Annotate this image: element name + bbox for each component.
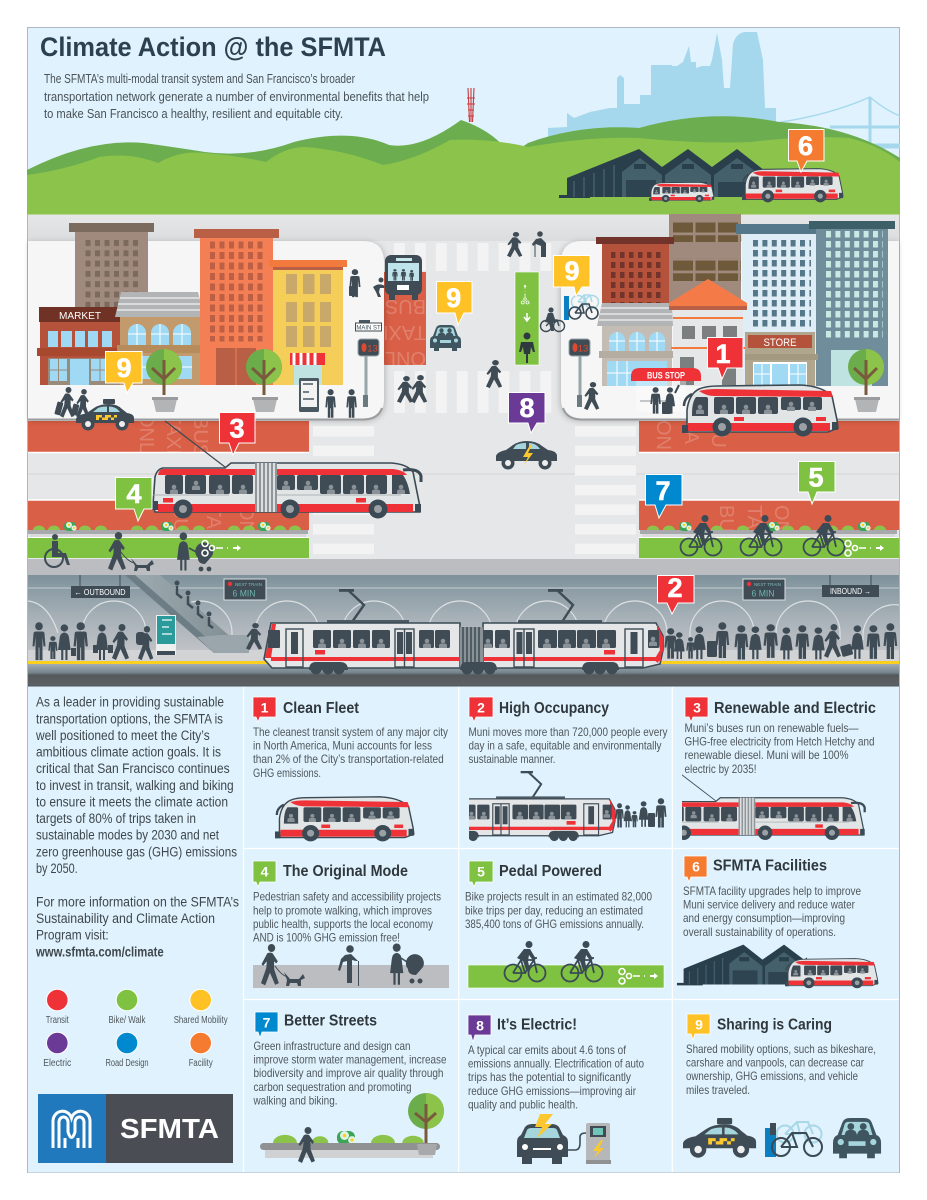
left lower lanes — [28, 412, 309, 558]
right lower lanes: BU — [707, 420, 729, 448]
pedestrian pair — [397, 375, 427, 403]
sign: inbound: INBOUND → — [830, 587, 871, 596]
body text: AND is 100% GHG emission free! — [253, 930, 400, 944]
crosswalk stripes — [313, 243, 636, 556]
left lower lanes: BUS — [189, 416, 211, 457]
people on sidewalk — [325, 389, 357, 418]
left lower lanes: TAXI — [202, 505, 224, 548]
body text: biodiversity and improve air quality through — [254, 1066, 444, 1080]
icon: street sign and signal — [356, 320, 382, 407]
icon: street tree — [848, 349, 884, 412]
icon: bike lane marking right — [845, 540, 884, 556]
icon: Muni facility barn — [559, 149, 765, 198]
sign: next train — [224, 579, 266, 600]
heading: Renewable and Electric — [714, 700, 876, 717]
badge 1 — [708, 338, 743, 379]
panel: 3 Renewable and Electric — [682, 696, 876, 840]
body text: day in a safe, equitable and environmentally — [468, 739, 662, 753]
badge 8: 8 — [476, 1018, 484, 1034]
body text — [253, 890, 441, 944]
badge 4 — [116, 478, 152, 521]
legend: Road Design — [106, 1058, 148, 1069]
legend: Electric — [43, 1058, 71, 1069]
left sidewalk block — [28, 241, 384, 420]
text block: intro: to invest in transit, walking and biking — [36, 778, 234, 793]
pedestrian — [584, 382, 599, 410]
SFMTA logo: SFMTA — [120, 1113, 219, 1144]
cyclist — [680, 515, 722, 556]
sign: outbound — [71, 575, 130, 598]
badge 4: 4 — [261, 864, 269, 880]
intro text: transportation network generate a number of environmental benefits that help — [44, 90, 429, 104]
panel: subway station — [28, 575, 899, 686]
body text: electric by 2035! — [684, 762, 756, 776]
sign: outbound: ← OUTBOUND — [74, 588, 126, 597]
building: market — [37, 307, 120, 385]
body text: 385,400 tons of GHG emissions annually. — [465, 917, 644, 931]
right sidewalk block — [561, 241, 899, 420]
panel: 5 Pedal Powered — [465, 861, 664, 988]
left lower lanes: BUS — [169, 505, 191, 546]
text block: more information: Program visit: — [36, 928, 109, 943]
body text: help to promote walking, which improves — [253, 903, 432, 917]
waiting passengers left — [32, 622, 153, 660]
body text — [253, 725, 448, 780]
body text: trips has the potential to significantly — [468, 1070, 631, 1084]
badge 9 intersection: 9 — [446, 283, 461, 313]
sign: next train: NEXT TRAIN — [754, 582, 781, 587]
intro text: The SFMTA’s multi-modal transit system and San Francisco’s broader — [44, 72, 355, 86]
pedestrian with stroller — [177, 532, 213, 571]
icon: wayfinding kiosk — [299, 378, 319, 412]
icon: bus — [785, 959, 878, 988]
body text: quality and public health. — [468, 1097, 578, 1111]
badge 9 bikeshare — [554, 256, 590, 296]
heading: The Original Mode — [283, 863, 408, 880]
badge 3 — [220, 412, 255, 455]
icon: bikeshare — [765, 1122, 822, 1157]
text block: intro: transportation options, the SFMTA is — [36, 711, 223, 726]
icon: cyclist — [504, 941, 546, 982]
text block: intro — [35, 695, 237, 876]
badge 2: 2 — [477, 700, 485, 716]
text block: more information — [35, 895, 239, 960]
badge 5: 5 — [808, 462, 824, 492]
text block: intro: targets of 80% of trips taken in — [36, 811, 196, 826]
people on left sidewalk — [45, 532, 213, 571]
right lower lanes: BUS — [715, 505, 737, 546]
SFMTA logo — [38, 1094, 233, 1163]
child boarding — [373, 278, 385, 297]
building: brown tall — [669, 214, 741, 307]
badge 9 bikeshare: 9 — [564, 256, 580, 286]
heading: Better Streets — [284, 1012, 377, 1030]
badge 8: 8 — [519, 393, 535, 423]
badge 3 — [685, 697, 708, 722]
panel: street scene — [28, 213, 899, 575]
body text: walking and biking. — [253, 1093, 338, 1107]
people waiting at taxi — [54, 387, 90, 418]
right lower lanes: TAXI — [743, 505, 765, 548]
road surface — [28, 214, 899, 559]
heading: It’s Electric! — [497, 1016, 577, 1034]
panel: 2 High Occupancy — [468, 696, 668, 842]
bike lane strip — [468, 965, 664, 988]
text block: intro: by 2050. — [36, 861, 78, 876]
building: brown tower — [69, 223, 154, 312]
badge 6: 6 — [692, 858, 700, 874]
sign: inbound — [822, 575, 879, 597]
sign: next train — [743, 579, 785, 600]
title: Climate Action @ the SFMTA — [40, 32, 386, 62]
pedestrian crossing — [486, 360, 502, 388]
icon: bus at facility — [742, 169, 843, 202]
waiting passengers right — [664, 622, 897, 660]
badge 2: 2 — [667, 573, 683, 603]
cyclist — [804, 515, 844, 556]
body text: in North America, Muni accounts for less — [253, 739, 432, 753]
icon: street sign and signal: MAIN ST — [356, 326, 381, 332]
body text: and energy consumption—improving — [683, 911, 845, 925]
icon: bus stop — [631, 368, 701, 412]
icon: charging station — [586, 1123, 611, 1164]
escalator — [125, 575, 249, 653]
person walking a bicycle — [540, 307, 564, 332]
badge 3: 3 — [693, 700, 701, 716]
station kiosk — [156, 615, 176, 655]
body text: Shared mobility options, such as bikeshare, — [686, 1042, 876, 1056]
text block: intro: sustainable modes by 2030 and net — [36, 828, 219, 843]
icon: bike marking — [619, 968, 658, 984]
icon: articulated electric bus — [152, 421, 421, 518]
legend — [43, 989, 228, 1069]
icon: small bus at facility — [649, 182, 714, 202]
body text — [683, 884, 861, 939]
badge 6 — [684, 856, 707, 882]
body text: Pedestrian safety and accessibility projects — [253, 890, 441, 904]
body text: ownership, GHG emissions, and vehicle — [686, 1069, 858, 1083]
person walking to train — [246, 623, 262, 650]
left lower lanes: TAXI — [162, 412, 184, 455]
body text: public health, supports the local economy — [253, 917, 433, 931]
body text: than 2% of the City’s transportation-related — [253, 752, 444, 766]
body text — [686, 1042, 876, 1097]
body text: The cleanest transit system of any major city — [253, 725, 448, 739]
badge 4: 4 — [126, 479, 142, 509]
body text: Muni moves more than 720,000 people every — [468, 725, 668, 739]
badge 2 — [658, 573, 694, 614]
badge 6: 6 — [798, 131, 813, 161]
text block: more information: Sustainability and Climate Action — [36, 911, 215, 926]
sign: next train: NEXT TRAIN — [235, 582, 262, 587]
text block: intro: zero greenhouse gas (GHG) emissions — [36, 844, 237, 859]
body text: improve storm water management, increase — [254, 1053, 447, 1067]
left lower lanes: ONLY — [235, 505, 257, 558]
icon: Sutro Tower — [467, 88, 475, 122]
building: orange roof house — [669, 279, 747, 386]
body text: carbon sequestration and promoting — [254, 1080, 412, 1094]
icon: bus stop: BUS STOP — [647, 370, 686, 382]
badge 7: 7 — [655, 476, 671, 506]
center transit lane: BUS — [385, 295, 426, 317]
body text — [684, 721, 874, 776]
heading: Pedal Powered — [499, 863, 602, 880]
body text: reduce GHG emissions—improving air — [468, 1084, 636, 1098]
intro text: to make San Francisco a healthy, resilient and equitable city. — [44, 107, 343, 121]
icon: pedestrian signal — [569, 339, 590, 407]
text block: intro: As a leader in providing sustainable — [36, 695, 224, 710]
building: market: MARKET — [59, 311, 101, 322]
icon: pedestrian with stroller — [390, 943, 424, 985]
body text: bike trips per day, reducing an estimated — [465, 903, 643, 917]
icon: street tree — [246, 349, 282, 412]
icon: articulated bus — [682, 774, 866, 840]
building: teal tower — [809, 221, 895, 386]
icon: barn — [676, 944, 807, 986]
icon: light rail train — [264, 589, 663, 674]
body text: Bike projects result in an estimated 82,000 — [465, 890, 652, 904]
badge 6 — [788, 130, 824, 172]
body text: carshare and vanpools, can decrease car — [686, 1056, 864, 1070]
icon: bike lane marking left — [202, 540, 241, 556]
station arches — [28, 601, 899, 640]
legend: Shared Mobility — [174, 1015, 228, 1026]
badge 7 — [255, 1012, 278, 1038]
body text: Green infrastructure and design can — [254, 1039, 410, 1053]
body text: GHG emissions. — [253, 766, 321, 780]
badge 4 — [253, 861, 276, 887]
body text: SFMTA facility upgrades help to improve — [683, 884, 861, 898]
people on escalator — [174, 580, 213, 628]
panel: 6 SFMTA Facilities — [677, 856, 878, 988]
icon: city skyline — [548, 32, 776, 165]
front hills — [27, 137, 900, 214]
badge 5 — [469, 861, 493, 887]
body text: A typical car emits about 4.6 tons of — [468, 1043, 627, 1057]
panel: information section — [28, 686, 899, 1172]
panel: 7 Better Streets — [253, 1012, 447, 1163]
text block: intro: ambitious climate action goals. It is — [36, 745, 221, 760]
badge 9: 9 — [695, 1016, 703, 1032]
icon: waiting crowd — [615, 798, 666, 828]
body text — [468, 1043, 644, 1111]
text block: intro: critical that San Francisco continues — [36, 761, 230, 776]
icon: green planter with tree — [260, 1093, 444, 1158]
icon: bikeshare station — [564, 295, 598, 320]
panel: 1 Clean Fleet — [253, 697, 448, 841]
sidewalk strip — [253, 965, 449, 988]
icon: street sign and signal: 13 — [367, 344, 378, 354]
body text: GHG-free electricity from Hetch Hetchy and — [684, 735, 874, 749]
center transit lane: ONLY — [373, 347, 426, 369]
badge 7: 7 — [263, 1014, 271, 1030]
people at bus stop — [650, 385, 679, 414]
panel: 9 Sharing is Caring — [683, 1014, 881, 1158]
icon: electric car front — [517, 1114, 586, 1164]
badge 5 — [798, 462, 835, 504]
icon: electric car — [496, 441, 557, 470]
body text — [468, 725, 668, 766]
building: beige arcade — [597, 303, 673, 386]
badge 9 intersection — [436, 282, 472, 325]
building: orange tower — [194, 229, 279, 385]
sign: next train: 6 MIN — [752, 588, 775, 600]
icon: taxi — [76, 399, 134, 430]
center transit lane: TAXI — [383, 321, 426, 343]
panel: 8 It's Electric! — [468, 1015, 644, 1164]
station top edge — [28, 685, 899, 686]
icon: train — [469, 771, 616, 842]
right lower lanes — [639, 420, 899, 558]
right lower lanes: TA — [680, 420, 702, 445]
badge 9 market: 9 — [116, 353, 132, 383]
back hills — [27, 116, 900, 214]
badge 9 — [687, 1014, 710, 1040]
body text — [253, 1039, 447, 1107]
icon: shared car front — [430, 325, 461, 351]
elderly pedestrian — [532, 231, 546, 257]
right lower lanes: ONLY — [770, 505, 792, 558]
text block: intro: to ensure it meets the climate action — [36, 794, 228, 810]
badge 9 market — [106, 352, 142, 393]
heading: High Occupancy — [499, 700, 609, 717]
heading: Sharing is Caring — [717, 1016, 832, 1034]
planting bushes — [33, 522, 886, 531]
body text: renewable diesel. Muni will be 100% — [684, 748, 849, 762]
pedestrian with dog — [108, 532, 154, 571]
badge 7 — [646, 474, 682, 518]
body text: overall sustainability of operations. — [683, 925, 836, 939]
platform and track — [28, 650, 899, 686]
icon: elderly pedestrian — [338, 945, 359, 986]
icon: taxi — [683, 1118, 756, 1158]
panel: 4 The Original Mode — [253, 861, 449, 988]
icon: cyclist — [562, 941, 602, 982]
panel: skyline and hills — [27, 32, 900, 214]
badge 3: 3 — [229, 414, 245, 444]
traveller with suitcase — [349, 269, 360, 297]
sign: next train: 6 MIN — [232, 588, 256, 600]
legend: Transit — [46, 1015, 69, 1026]
building: yellow — [269, 260, 347, 385]
text block: more information: www.sfmta.com/climate — [35, 945, 164, 960]
heading: Clean Fleet — [283, 700, 360, 717]
icon: street tree — [146, 349, 182, 412]
legend: Bike/ Walk — [108, 1015, 146, 1026]
text block: more information: For more information on the SFMTA’s — [36, 895, 239, 910]
icon: car front — [833, 1118, 881, 1158]
icon: bay bridge — [775, 97, 900, 150]
icon: pedestrian with dog — [261, 944, 305, 986]
pedestrian crossing top — [507, 232, 522, 257]
icon: wheelchair user — [45, 534, 70, 567]
intro text — [44, 72, 429, 121]
body text: sustainable manner. — [468, 752, 556, 766]
building: tan arcade — [115, 292, 204, 385]
icon: bus front — [385, 255, 422, 300]
badge 5: 5 — [477, 864, 485, 880]
text block: intro: well positioned to meet the City’s — [35, 728, 210, 743]
body text: emissions annually. Electrification of auto — [468, 1057, 644, 1071]
building: store — [745, 332, 818, 386]
body text: Muni service delivery and reduce water — [683, 898, 855, 912]
body text: Muni’s buses run on renewable fuels— — [684, 721, 858, 735]
left lower lanes: ONLY — [135, 412, 157, 465]
icon: bus — [275, 797, 414, 841]
badge 1: 1 — [261, 700, 269, 716]
badge 1 — [253, 697, 276, 722]
badge 8 — [468, 1015, 491, 1042]
badge 2 — [469, 697, 493, 722]
center bike lane — [515, 272, 539, 365]
heading: SFMTA Facilities — [713, 858, 827, 874]
sidewalk strip — [28, 559, 899, 575]
icon: bus — [682, 385, 838, 436]
body text: miles traveled. — [686, 1083, 750, 1097]
badge 1: 1 — [715, 339, 731, 369]
cyclist — [740, 515, 782, 556]
building: brick — [596, 237, 674, 304]
badge 8 — [508, 392, 545, 433]
legend: Facility — [189, 1058, 213, 1069]
icon: pedestrian — [298, 1127, 315, 1163]
body text — [465, 890, 652, 931]
building: store: STORE — [764, 337, 796, 349]
icon: pedestrian signal: 13 — [578, 344, 588, 354]
building: blue tower — [736, 224, 816, 386]
right lower lanes: ON — [652, 420, 674, 450]
center transit lane — [384, 272, 426, 365]
